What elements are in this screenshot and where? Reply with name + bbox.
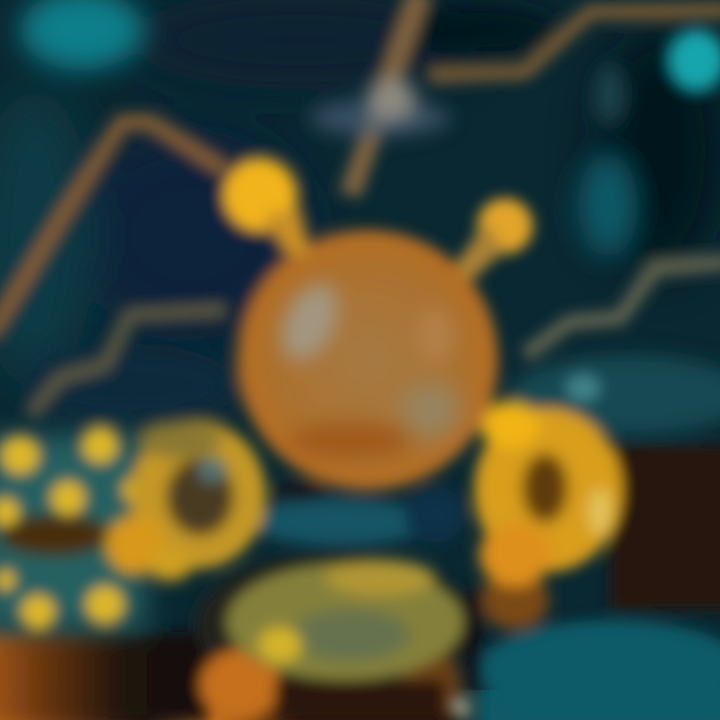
icon: bottom coin bowl <box>195 553 475 720</box>
highlight: pale bottom edge <box>454 698 470 718</box>
line: left rising market line <box>0 122 225 335</box>
line: right market line <box>525 262 720 355</box>
highlight: small pale spot on band <box>566 374 600 402</box>
glow: right teal column <box>578 153 638 257</box>
icon: small coins <box>0 427 148 629</box>
highlight: coin right tint <box>417 307 453 363</box>
icon: upper right bulb <box>455 198 533 282</box>
icon: upper left bulb <box>224 159 310 255</box>
highlight: coin inner shading arc <box>290 422 410 458</box>
highlight: coin lower right sheen <box>400 382 460 438</box>
line: lower left market line <box>30 310 225 415</box>
highlight: coin upper left sheen <box>271 276 349 368</box>
highlight: pale knot on central line <box>368 78 416 122</box>
panel: right dark brown block <box>610 445 720 610</box>
highlight: pale haze near top center <box>310 100 450 136</box>
strip: bottom edge colour base <box>0 690 720 720</box>
icon: dark shadow under central coin <box>272 483 328 501</box>
panel: centre teal gap under coin <box>250 498 430 546</box>
panel: bottom left orange base <box>0 632 210 720</box>
line: top right market line <box>430 10 720 75</box>
icon: left ring coin <box>105 421 266 581</box>
line: far right vertical stub <box>705 190 720 260</box>
glow: faint mark upper right <box>596 65 624 125</box>
icon: central coin <box>238 230 498 490</box>
background: dark and teal patches <box>0 0 720 425</box>
panel: navy patch under coin <box>405 487 465 543</box>
group: left coin cluster <box>0 427 148 630</box>
glow: top left teal <box>20 0 144 70</box>
icon: right coin <box>474 401 622 630</box>
glow: top right teal <box>669 30 720 90</box>
line: central vertical market line <box>350 0 420 195</box>
panel: bottom right teal ellipse <box>477 620 720 720</box>
panel: lower right teal band <box>510 355 720 435</box>
panel: bottom right teal fill <box>490 670 720 720</box>
